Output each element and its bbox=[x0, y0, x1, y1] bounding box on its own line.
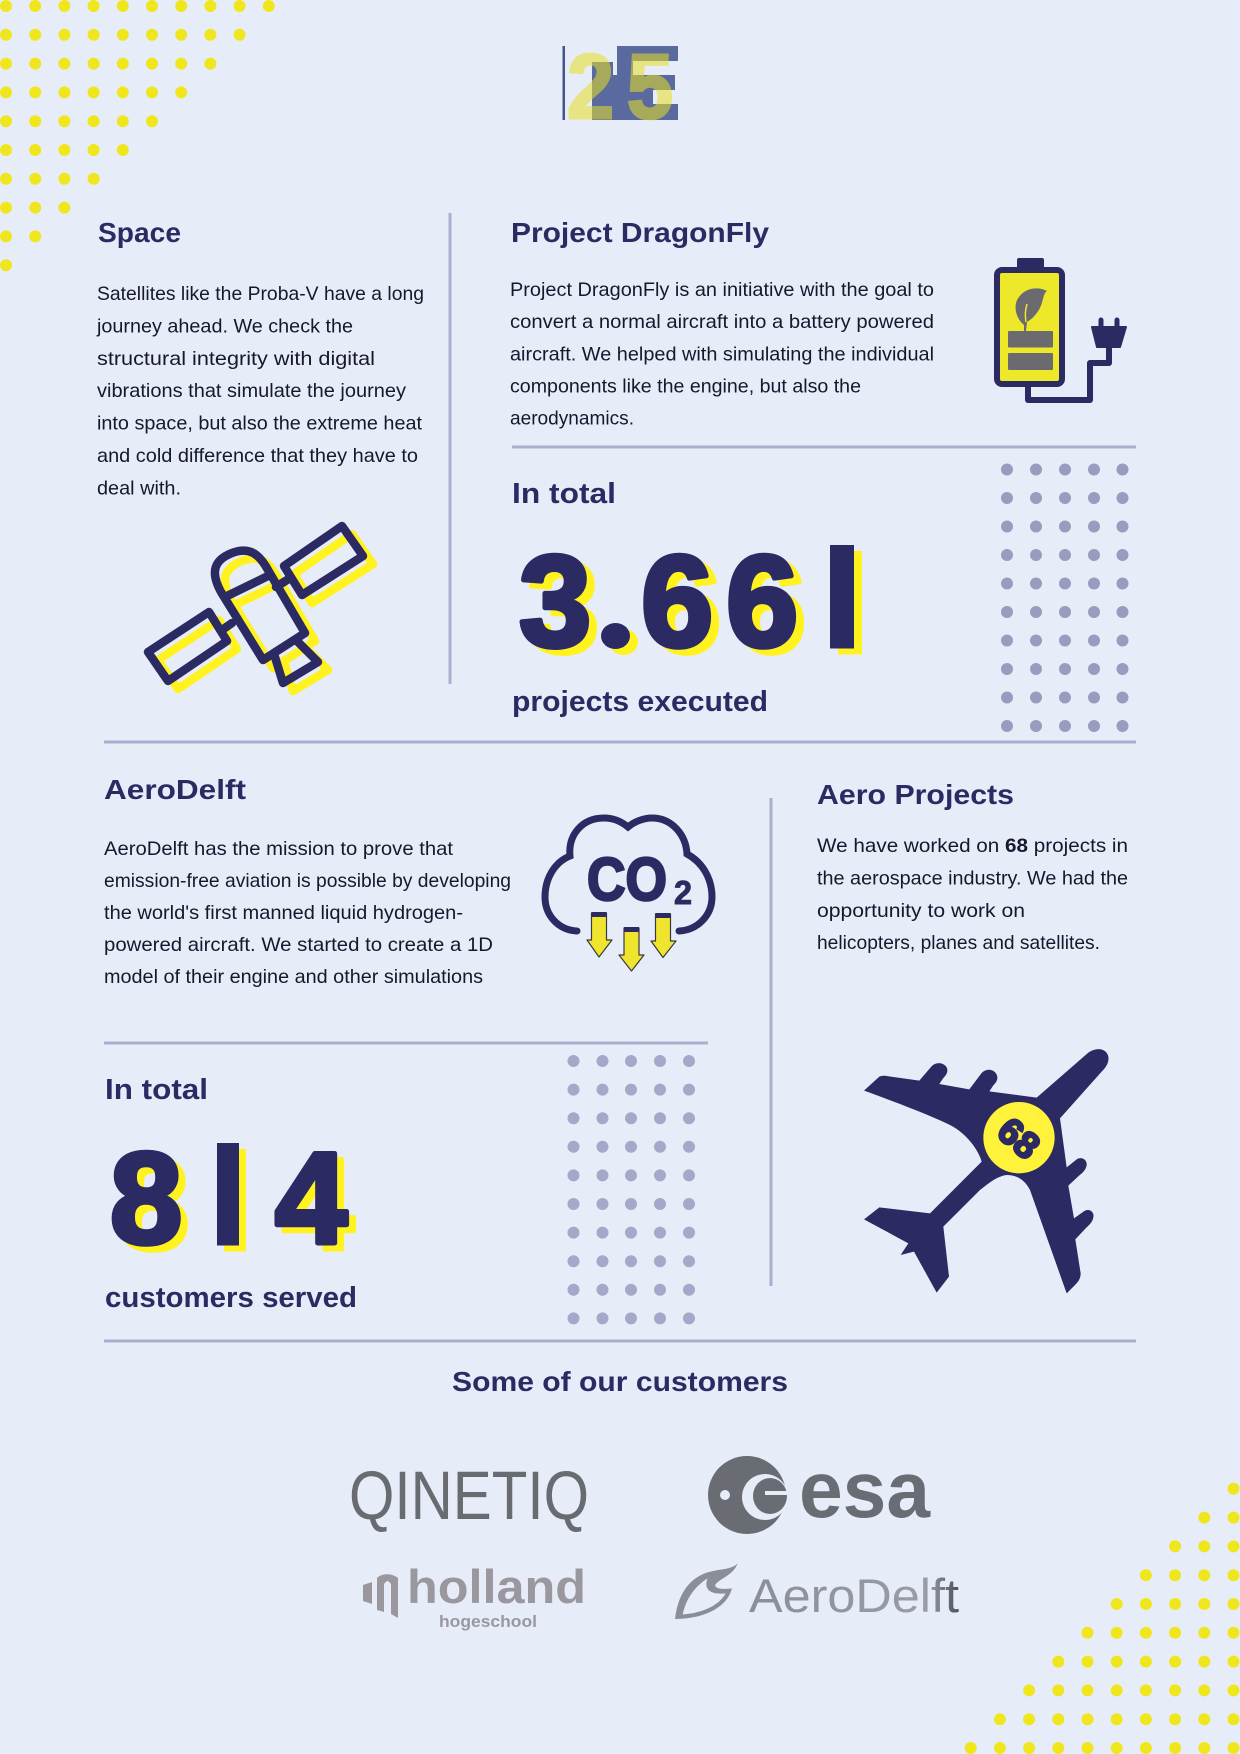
logo: inholland hogeschool: holland bbox=[407, 1560, 586, 1613]
text: AeroDelft description bbox=[104, 838, 511, 988]
decorative dots: grey panel lower bbox=[574, 1061, 689, 1320]
text: AeroDelft description: powered aircraft. We started to create a 1D bbox=[104, 934, 493, 956]
icon: satellite bbox=[148, 526, 373, 691]
logo: QinetiQ: QINETIQ bbox=[349, 1457, 589, 1534]
decorative dots: grey panel upper bbox=[1007, 470, 1122, 728]
icon: airplane with 68 badge bbox=[864, 1049, 1108, 1293]
text: Space description: Satellites like the Proba-V have a long bbox=[97, 283, 424, 305]
divider: middle / customers section bbox=[104, 1340, 1136, 1342]
divider: aerodelft / total bbox=[104, 1042, 708, 1044]
heading: Aero Projects: Aero Projects bbox=[817, 779, 1014, 810]
panel: Space bbox=[96, 217, 424, 691]
number: 814 customers: 814 bbox=[117, 1131, 354, 1277]
heading: Some of our customers: Some of our customers bbox=[452, 1366, 788, 1397]
text: DragonFly description: aerodynamics. bbox=[510, 408, 634, 430]
text: AeroDelft description: AeroDelft has the mission to prove that bbox=[104, 838, 454, 860]
decorative dots: bottom right bbox=[969, 1489, 1234, 1748]
number: 3.661 projects: 3.661 bbox=[527, 534, 880, 680]
text: Space description: structural integrity with digital bbox=[97, 348, 375, 370]
divider: space / dragonfly bbox=[448, 213, 452, 684]
label: In total: In total bbox=[512, 478, 616, 510]
text: DragonFly description: Project DragonFly is an initiative with the goal to bbox=[510, 279, 934, 301]
text: Aero Projects description: We have worked on 68 projects in bbox=[817, 835, 1128, 857]
badge number: 68: 68 bbox=[990, 1109, 1048, 1167]
text: Space description: deal with. bbox=[97, 477, 181, 499]
heading: AeroDelft: AeroDelft bbox=[104, 774, 246, 805]
logo: esa: esa bbox=[799, 1445, 930, 1534]
logo: 25 years bbox=[562, 36, 678, 138]
label: In total: In total bbox=[105, 1074, 208, 1106]
heading: Project DragonFly: Project DragonFly bbox=[511, 217, 769, 248]
number: 814 customers: 814 bbox=[110, 1125, 347, 1271]
text: Space description: and cold difference that they have to bbox=[97, 445, 418, 467]
text: AeroDelft description: the world's first manned liquid hydrogen- bbox=[104, 902, 463, 924]
text: Aero Projects description: the aerospace industry. We had the bbox=[817, 868, 1128, 890]
icon: battery with leaf and plug bbox=[997, 258, 1126, 400]
logo: inholland hogeschool bbox=[363, 1560, 586, 1631]
text: AeroDelft description: model of their engine and other simulations bbox=[104, 966, 483, 988]
logo: AeroDelft: AeroDelft bbox=[749, 1569, 959, 1622]
divider: dragonfly / total bbox=[512, 446, 1136, 448]
text: Aero Projects description bbox=[817, 835, 1128, 954]
logo: inholland hogeschool: hogeschool bbox=[439, 1612, 537, 1631]
number: 3.661 projects: 3.661 bbox=[519, 528, 872, 674]
icon: CO2 cloud with arrows: 2 bbox=[674, 874, 692, 911]
divider: aerodelft / aero projects bbox=[770, 798, 772, 1286]
text: Space description: into space, but also the extreme heat bbox=[97, 413, 423, 435]
panel: total projects bbox=[512, 478, 880, 718]
decorative dots: top left bbox=[6, 6, 270, 265]
icon: CO2 cloud with arrows: CO bbox=[587, 846, 667, 913]
heading: Space: Space bbox=[98, 217, 181, 248]
label: customers served: customers served bbox=[105, 1282, 357, 1314]
icon: CO2 cloud with arrows bbox=[545, 818, 712, 971]
panel: total customers bbox=[105, 1074, 357, 1314]
text: Space description: journey ahead. We check the bbox=[96, 315, 353, 337]
panel: Project DragonFly bbox=[510, 217, 1126, 430]
panel: AeroDelft bbox=[104, 774, 712, 988]
logo: AeroDelft bbox=[675, 1563, 959, 1622]
text: Aero Projects description: opportunity to work on bbox=[817, 900, 1025, 922]
panel: Aero Projects bbox=[817, 779, 1128, 1293]
logo: esa bbox=[708, 1445, 930, 1534]
text: Space description bbox=[96, 283, 424, 499]
divider: upper / middle section bbox=[104, 740, 1136, 744]
logo: 25 years: 5 bbox=[627, 36, 673, 138]
text: Aero Projects description: helicopters, planes and satellites. bbox=[817, 932, 1100, 954]
text: DragonFly description bbox=[510, 279, 934, 430]
text: DragonFly description: components like the engine, but also the bbox=[510, 376, 861, 398]
text: AeroDelft description: emission-free aviation is possible by developing bbox=[104, 870, 511, 892]
logo: 25 years: 2 bbox=[567, 36, 614, 138]
text: Space description: vibrations that simulate the journey bbox=[97, 380, 406, 402]
text: DragonFly description: aircraft. We helped with simulating the individual bbox=[510, 343, 934, 365]
label: projects executed: projects executed bbox=[512, 686, 768, 718]
text: DragonFly description: convert a normal aircraft into a battery powered bbox=[510, 311, 934, 333]
